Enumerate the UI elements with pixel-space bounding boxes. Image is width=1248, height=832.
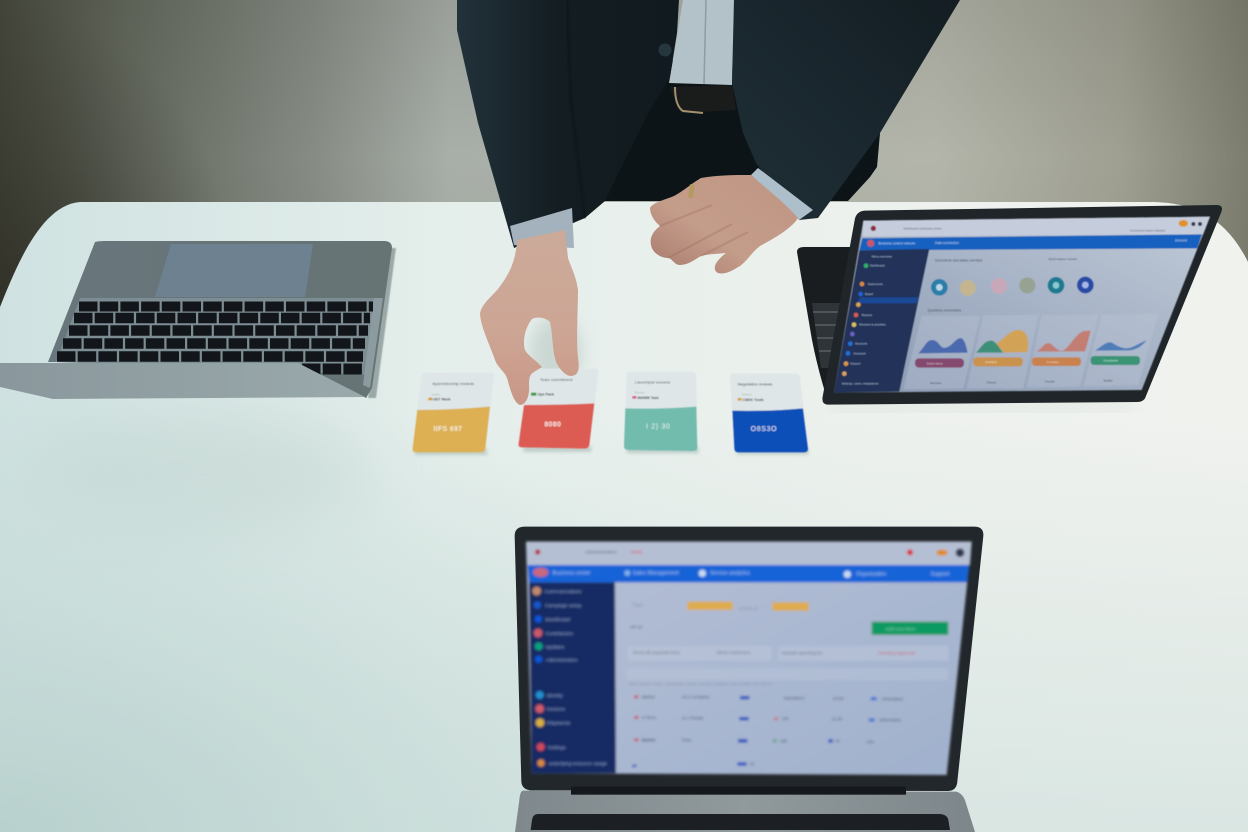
data table rows: In force xyxy=(642,715,657,720)
data table rows: Market xyxy=(642,737,656,742)
belt xyxy=(670,85,736,113)
jacket sleeve seam xyxy=(567,0,585,218)
right hand resting on table xyxy=(650,175,798,273)
blue header bar: Business control network xyxy=(878,241,916,245)
data table rows: Information xyxy=(879,717,902,722)
teal card: WAMW Task xyxy=(637,396,660,400)
data table rows: 10.00 xyxy=(833,696,844,701)
front laptop with data table dashboard xyxy=(515,527,983,832)
sidebar: Board xyxy=(865,292,873,296)
chart card footers xyxy=(930,379,1113,385)
data table rows: Information xyxy=(882,696,904,701)
sidebar navigation: underlying resource usage xyxy=(548,761,607,767)
yellow card: Apprenticeship rewards xyxy=(432,381,474,386)
sidebar navigation: Settings xyxy=(548,745,566,751)
chart status pills: Available xyxy=(985,360,997,364)
sidebar xyxy=(834,249,929,393)
yellow card xyxy=(413,373,494,452)
blue header bar xyxy=(859,234,1202,250)
data table rows: 10 xyxy=(749,762,755,767)
keyboard xyxy=(56,298,383,388)
left jacket panel xyxy=(457,0,679,248)
chart status pills: Active items xyxy=(927,361,943,365)
sidebar navigation: Updates xyxy=(546,644,565,650)
sidebar navigation: Administration xyxy=(546,657,577,663)
data table rows: 10 xyxy=(835,739,840,744)
background wall xyxy=(0,0,1248,310)
sidebar: Settings, users, integrations xyxy=(842,381,879,385)
blue header bar: Account xyxy=(1175,238,1187,242)
summary filter boxes: Show all requests from xyxy=(633,650,680,655)
area chart cards xyxy=(903,314,1158,389)
table top xyxy=(0,202,1248,832)
blue header bar xyxy=(527,565,969,582)
hand picking card xyxy=(480,230,579,405)
green action button xyxy=(872,622,948,635)
sidebar navigation: Dashboard xyxy=(546,617,570,623)
filter tags: Include all xyxy=(738,606,758,611)
chart status pills: In review xyxy=(1047,360,1059,364)
yellow card: GET Work xyxy=(433,398,452,402)
red card: 8080 xyxy=(544,421,561,428)
trackpad xyxy=(155,244,313,297)
summary filter boxes: Pending approval xyxy=(878,651,915,656)
data table rows xyxy=(632,694,904,767)
data table rows: Market xyxy=(642,694,656,699)
summary filter boxes: latest customers xyxy=(717,650,751,655)
sidebar: Dashboard xyxy=(870,264,885,268)
blue header bar: Business center xyxy=(553,571,591,577)
browser chrome xyxy=(862,217,1210,237)
dashboard screen: Quick feature reviews xyxy=(1048,257,1078,261)
chart card footers: Partner xyxy=(987,380,996,384)
blue header bar: Support xyxy=(931,572,950,578)
red card: Team commitment xyxy=(540,377,573,382)
summary heading: Quarterly summaries xyxy=(927,309,961,313)
right laptop with analytics dashboard xyxy=(797,205,1222,410)
browser chrome: Administration xyxy=(585,550,617,556)
laptop deck xyxy=(48,241,392,398)
filter tags: Tags xyxy=(632,603,643,609)
teal card: Launchpad success xyxy=(635,380,670,385)
sidebar navigation: Invoices xyxy=(547,707,565,713)
filter tags: All 12 xyxy=(630,624,643,630)
left shirt cuff xyxy=(510,208,574,248)
sidebar navigation xyxy=(529,582,616,773)
blue header bar: Data connection xyxy=(935,241,959,245)
browser chrome: Alerts xyxy=(630,550,643,556)
yellow card: IIFS 697 xyxy=(433,426,462,433)
chart card footers: Growth xyxy=(1045,379,1055,383)
blue card: O8S3O xyxy=(751,426,777,433)
jacket button xyxy=(658,44,672,56)
data table rows: 11.2 Ready xyxy=(682,715,704,720)
teal card: I 2) 30 xyxy=(646,424,670,431)
hinge xyxy=(571,787,906,795)
person in dark suit xyxy=(457,0,960,248)
trousers and dark torso xyxy=(600,60,880,201)
summary filter boxes: Default reporting for xyxy=(782,650,823,655)
sidebar: Reports xyxy=(862,313,873,317)
browser chrome: Dashboard workspace online xyxy=(903,226,942,230)
chart card footers: Quality xyxy=(1103,379,1113,383)
sidebar navigation: Campaign setup xyxy=(545,603,582,609)
sidebar navigation: Contributors xyxy=(546,631,573,637)
sidebar: Reviews & activities xyxy=(859,323,886,327)
wedding ring xyxy=(688,184,695,198)
data table rows: 11.00 xyxy=(832,717,843,722)
blue card: Negotiation reviews xyxy=(738,381,772,386)
sidebar: Statements xyxy=(868,282,883,286)
summary filter boxes xyxy=(627,646,948,686)
browser chrome: Connected status indicator xyxy=(1130,229,1165,233)
blue header bar: Service analytics xyxy=(710,571,750,577)
cards row xyxy=(413,368,809,455)
sidebar: Support xyxy=(850,362,861,366)
data table rows: Pass xyxy=(682,738,691,743)
blue card: CBEK Tools xyxy=(743,398,764,402)
data table rows: 10.2 Complete xyxy=(682,695,710,700)
data table rows: Operations xyxy=(783,695,805,700)
green action button: Add new item xyxy=(885,626,915,632)
red card xyxy=(518,368,598,449)
sidebar navigation: Identity xyxy=(547,693,563,699)
sidebar: Menu overview xyxy=(872,254,893,258)
left laptop, open away from viewer xyxy=(0,241,396,399)
blue card xyxy=(730,373,808,452)
hand shadow on table xyxy=(530,316,582,388)
dashboard screen xyxy=(834,217,1210,393)
teal card xyxy=(624,372,697,451)
right shirt cuff xyxy=(751,168,813,220)
laptop lid front xyxy=(0,363,365,399)
chart status pills: Completed xyxy=(1103,359,1118,363)
dashboard screen xyxy=(526,542,972,775)
teal card: Pioneer xyxy=(634,390,645,394)
blue header bar: Organization xyxy=(856,572,886,578)
laptop shadow xyxy=(368,248,396,398)
sidebar: Outreach xyxy=(853,351,866,355)
section title: Documents and status overview xyxy=(935,258,983,262)
screen bezel xyxy=(822,205,1222,405)
card shadows xyxy=(415,446,809,455)
filter tags xyxy=(630,602,809,630)
laptop keyboard deck xyxy=(515,791,975,832)
red card: Ops Pack xyxy=(537,393,555,397)
blue card: Options xyxy=(742,392,752,396)
right jacket panel and sleeve xyxy=(732,0,960,220)
chart card footers: Services xyxy=(930,381,942,385)
blue header bar: Sales Management xyxy=(633,571,679,577)
browser chrome xyxy=(526,542,972,565)
right laptop shadow xyxy=(830,404,1135,410)
sidebar navigation: Communications xyxy=(544,589,582,595)
summary filter boxes: Table column name, description, status, priority, assignee, last update and options xyxy=(628,681,773,686)
screen bezel xyxy=(515,527,983,791)
yellow card: Inquiry xyxy=(432,392,441,396)
sidebar: Accounts xyxy=(855,342,868,346)
data table rows: Job xyxy=(782,716,789,721)
right laptop base xyxy=(797,247,852,395)
sidebar navigation: Shipments xyxy=(547,721,571,727)
chart status pills xyxy=(915,356,1140,368)
round app icons xyxy=(931,277,1094,296)
data table rows: Info xyxy=(867,739,874,744)
data table rows: Job xyxy=(780,738,788,743)
shirt xyxy=(669,0,734,85)
